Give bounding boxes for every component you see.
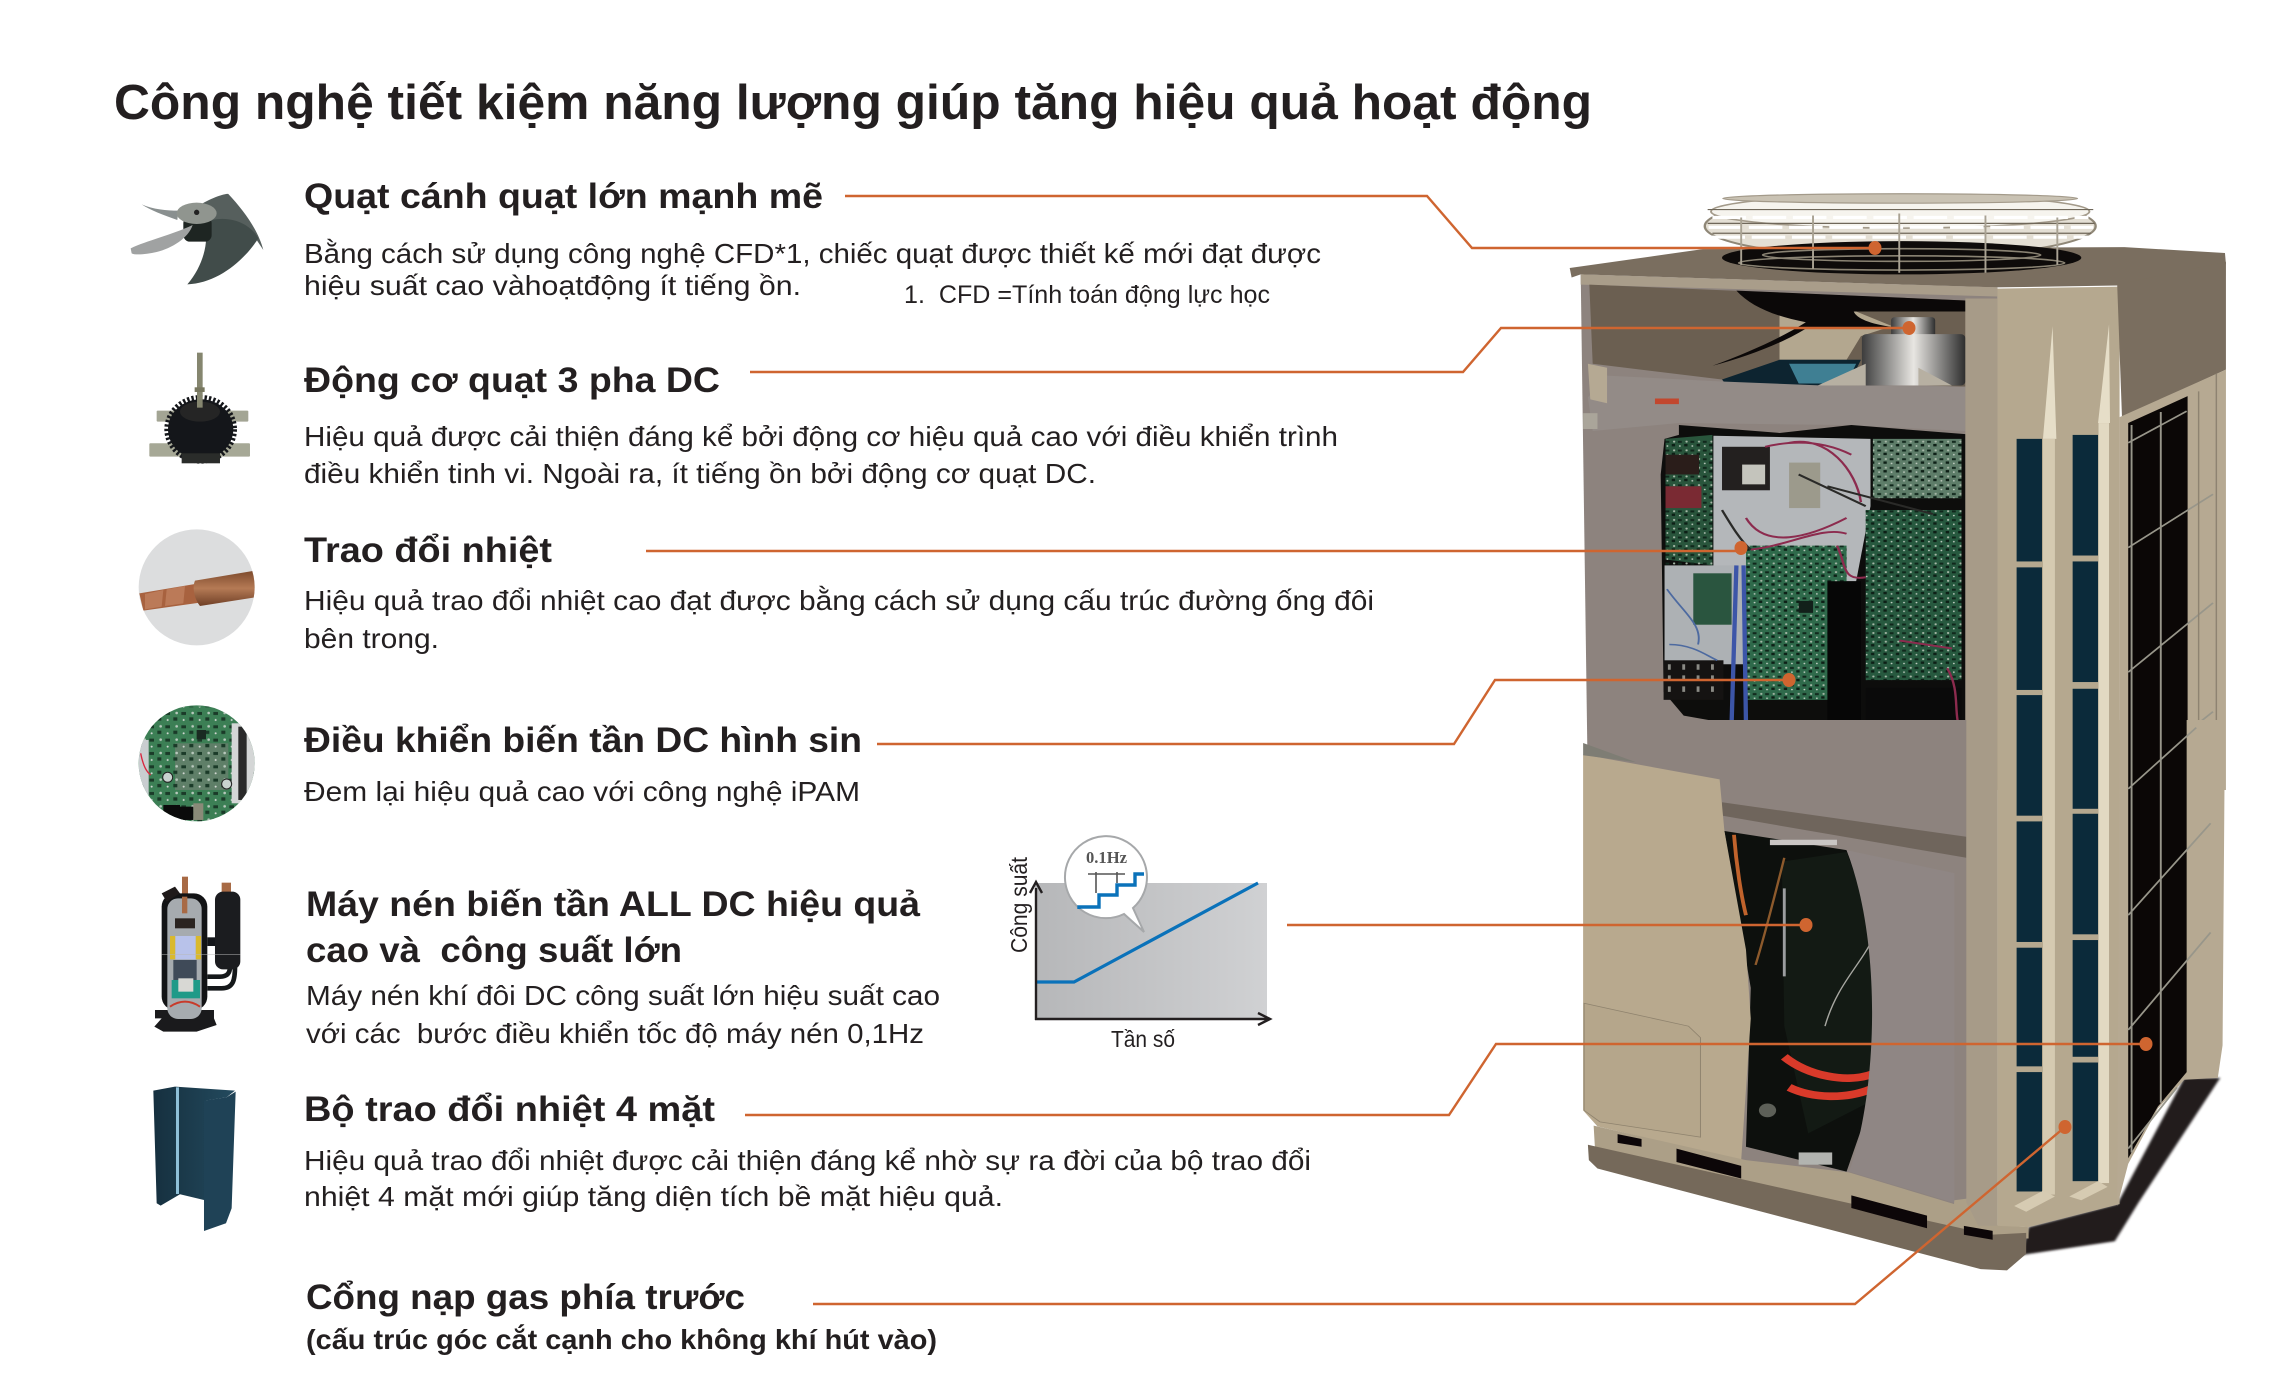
description: [304, 421, 1338, 489]
icon: copper tube: [139, 529, 255, 645]
side coil lower: [2128, 720, 2187, 1158]
description: [306, 980, 940, 1049]
fan guard: [1705, 194, 2096, 258]
description: điều khiển tinh vi. Ngoài ra, ít tiếng ồn bởi động cơ quạt DC.: [304, 458, 1096, 489]
section: motor: [149, 353, 1338, 489]
description: với các bước điều khiển tốc độ máy nén 0,1Hz: [306, 1018, 924, 1049]
magnifier callout: 0.1Hz: [1086, 848, 1127, 867]
fan blade inside: [1712, 291, 1965, 366]
top plate: [1570, 247, 2226, 287]
heading: Máy nén biến tần ALL DC hiệu quả: [306, 885, 921, 924]
heading: Cổng nạp gas phía trước: [306, 1278, 745, 1317]
ground shadow: [2021, 1078, 2220, 1255]
heading: Quạt cánh quạt lớn mạnh mẽ: [304, 177, 823, 216]
description: Hiệu quả được cải thiện đáng kể bởi động cơ hiệu quả cao với điều khiển trình: [304, 421, 1338, 452]
control box: [1661, 425, 1965, 763]
front cover: [1583, 754, 1751, 1160]
footnote: 1. CFD =Tính toán động lực học: [904, 281, 1270, 309]
icon: compressor: [154, 877, 240, 1032]
side frame: [2120, 370, 2226, 790]
heading: Trao đổi nhiệt: [304, 531, 552, 570]
heading: Bộ trao đổi nhiệt 4 mặt: [304, 1090, 715, 1129]
base rail: [1952, 1198, 2029, 1239]
icon: heat exchanger panel: [153, 1087, 236, 1231]
section: fan: [131, 177, 1321, 309]
side top panel: [2117, 262, 2226, 417]
body panel: [1588, 720, 1969, 1218]
description: nhiệt 4 mặt mới giúp tăng diện tích bề mặt hiệu quả.: [304, 1181, 1003, 1212]
lower divider band: [1722, 802, 1966, 858]
grille segments lower: [2017, 720, 2098, 1191]
leader line: fan: [845, 196, 1882, 255]
motor: [1722, 317, 1965, 385]
product illustration: outdoor unit cutaway: [1570, 194, 2226, 1270]
leader line: heat exchange: [646, 541, 1748, 555]
leader line: motor: [750, 321, 1916, 372]
gray panel right of compressor: [1847, 850, 1954, 1203]
corner pillar lower: [1966, 720, 1997, 1226]
heading: Điều khiển biến tần DC hình sin: [304, 721, 862, 760]
chart: capacity vs frequency: Công suất: [1006, 856, 1032, 953]
chart: capacity vs frequency: Tần số: [1111, 1026, 1175, 1052]
description: Hiệu quả trao đổi nhiệt cao đạt được bằng cách sử dụng cấu trúc đường ống đôi: [304, 585, 1374, 616]
icon: fan motor: [149, 353, 250, 463]
section: 4-sided heat exchanger: [153, 1087, 1311, 1231]
description: (cấu trúc góc cắt cạnh cho không khí hút vào): [306, 1324, 937, 1355]
upper opening: [1589, 285, 1965, 387]
title: Công nghệ tiết kiệm năng lượng giúp tăng hiệu quả hoạt động: [114, 76, 1592, 130]
section: gas inlet: [306, 1278, 937, 1355]
leader line: 4-sided heat exchanger: [745, 1037, 2152, 1115]
heading: Động cơ quạt 3 pha DC: [304, 361, 720, 400]
icon: circuit board: [139, 705, 255, 823]
leader line: compressor: [1287, 918, 1812, 932]
section: heat exchange: [139, 529, 1374, 654]
unit lower section: [1583, 720, 2225, 1270]
section: compressor: [154, 836, 1270, 1052]
icon: fan: [131, 194, 263, 284]
description: [304, 585, 1374, 654]
side frame lower: [2117, 720, 2225, 1206]
corner front lower: [1997, 720, 2120, 1227]
chart: capacity vs frequency: [1006, 836, 1270, 1052]
unit upper section: [1570, 194, 2226, 790]
front grille segments: [2017, 435, 2098, 790]
leader line: inverter: [877, 673, 1796, 744]
description: Máy nén khí đôi DC công suất lớn hiệu suất cao: [306, 980, 940, 1011]
description: Hiệu quả trao đổi nhiệt được cải thiện đáng kể nhờ sự ra đời của bộ trao đổi: [304, 1145, 1311, 1176]
fan opening: [1722, 213, 2081, 274]
heading: cao và công suất lớn: [306, 931, 682, 970]
description: Bằng cách sử dụng công nghệ CFD*1, chiếc quạt được thiết kế mới đạt được: [304, 238, 1321, 269]
upper band: [1588, 376, 1965, 431]
side coil: [2128, 396, 2188, 790]
description: bên trong.: [304, 623, 439, 654]
magnifier callout: [1065, 836, 1147, 932]
heading: [306, 885, 921, 970]
corner pillar: [1965, 299, 1997, 790]
compressor bay: [1724, 831, 1878, 1172]
description: Đem lại hiệu quả cao với công nghệ iPAM: [304, 776, 860, 807]
description: [304, 1145, 1311, 1212]
unit body base: [1581, 274, 1997, 790]
leader line: gas inlet: [813, 1120, 2072, 1304]
section: inverter: [139, 705, 862, 823]
description: hiệu suất cao vàhoạtđộng ít tiếng ồn.: [304, 270, 801, 301]
corner front panel: [1997, 287, 2120, 790]
description: [304, 238, 1321, 301]
